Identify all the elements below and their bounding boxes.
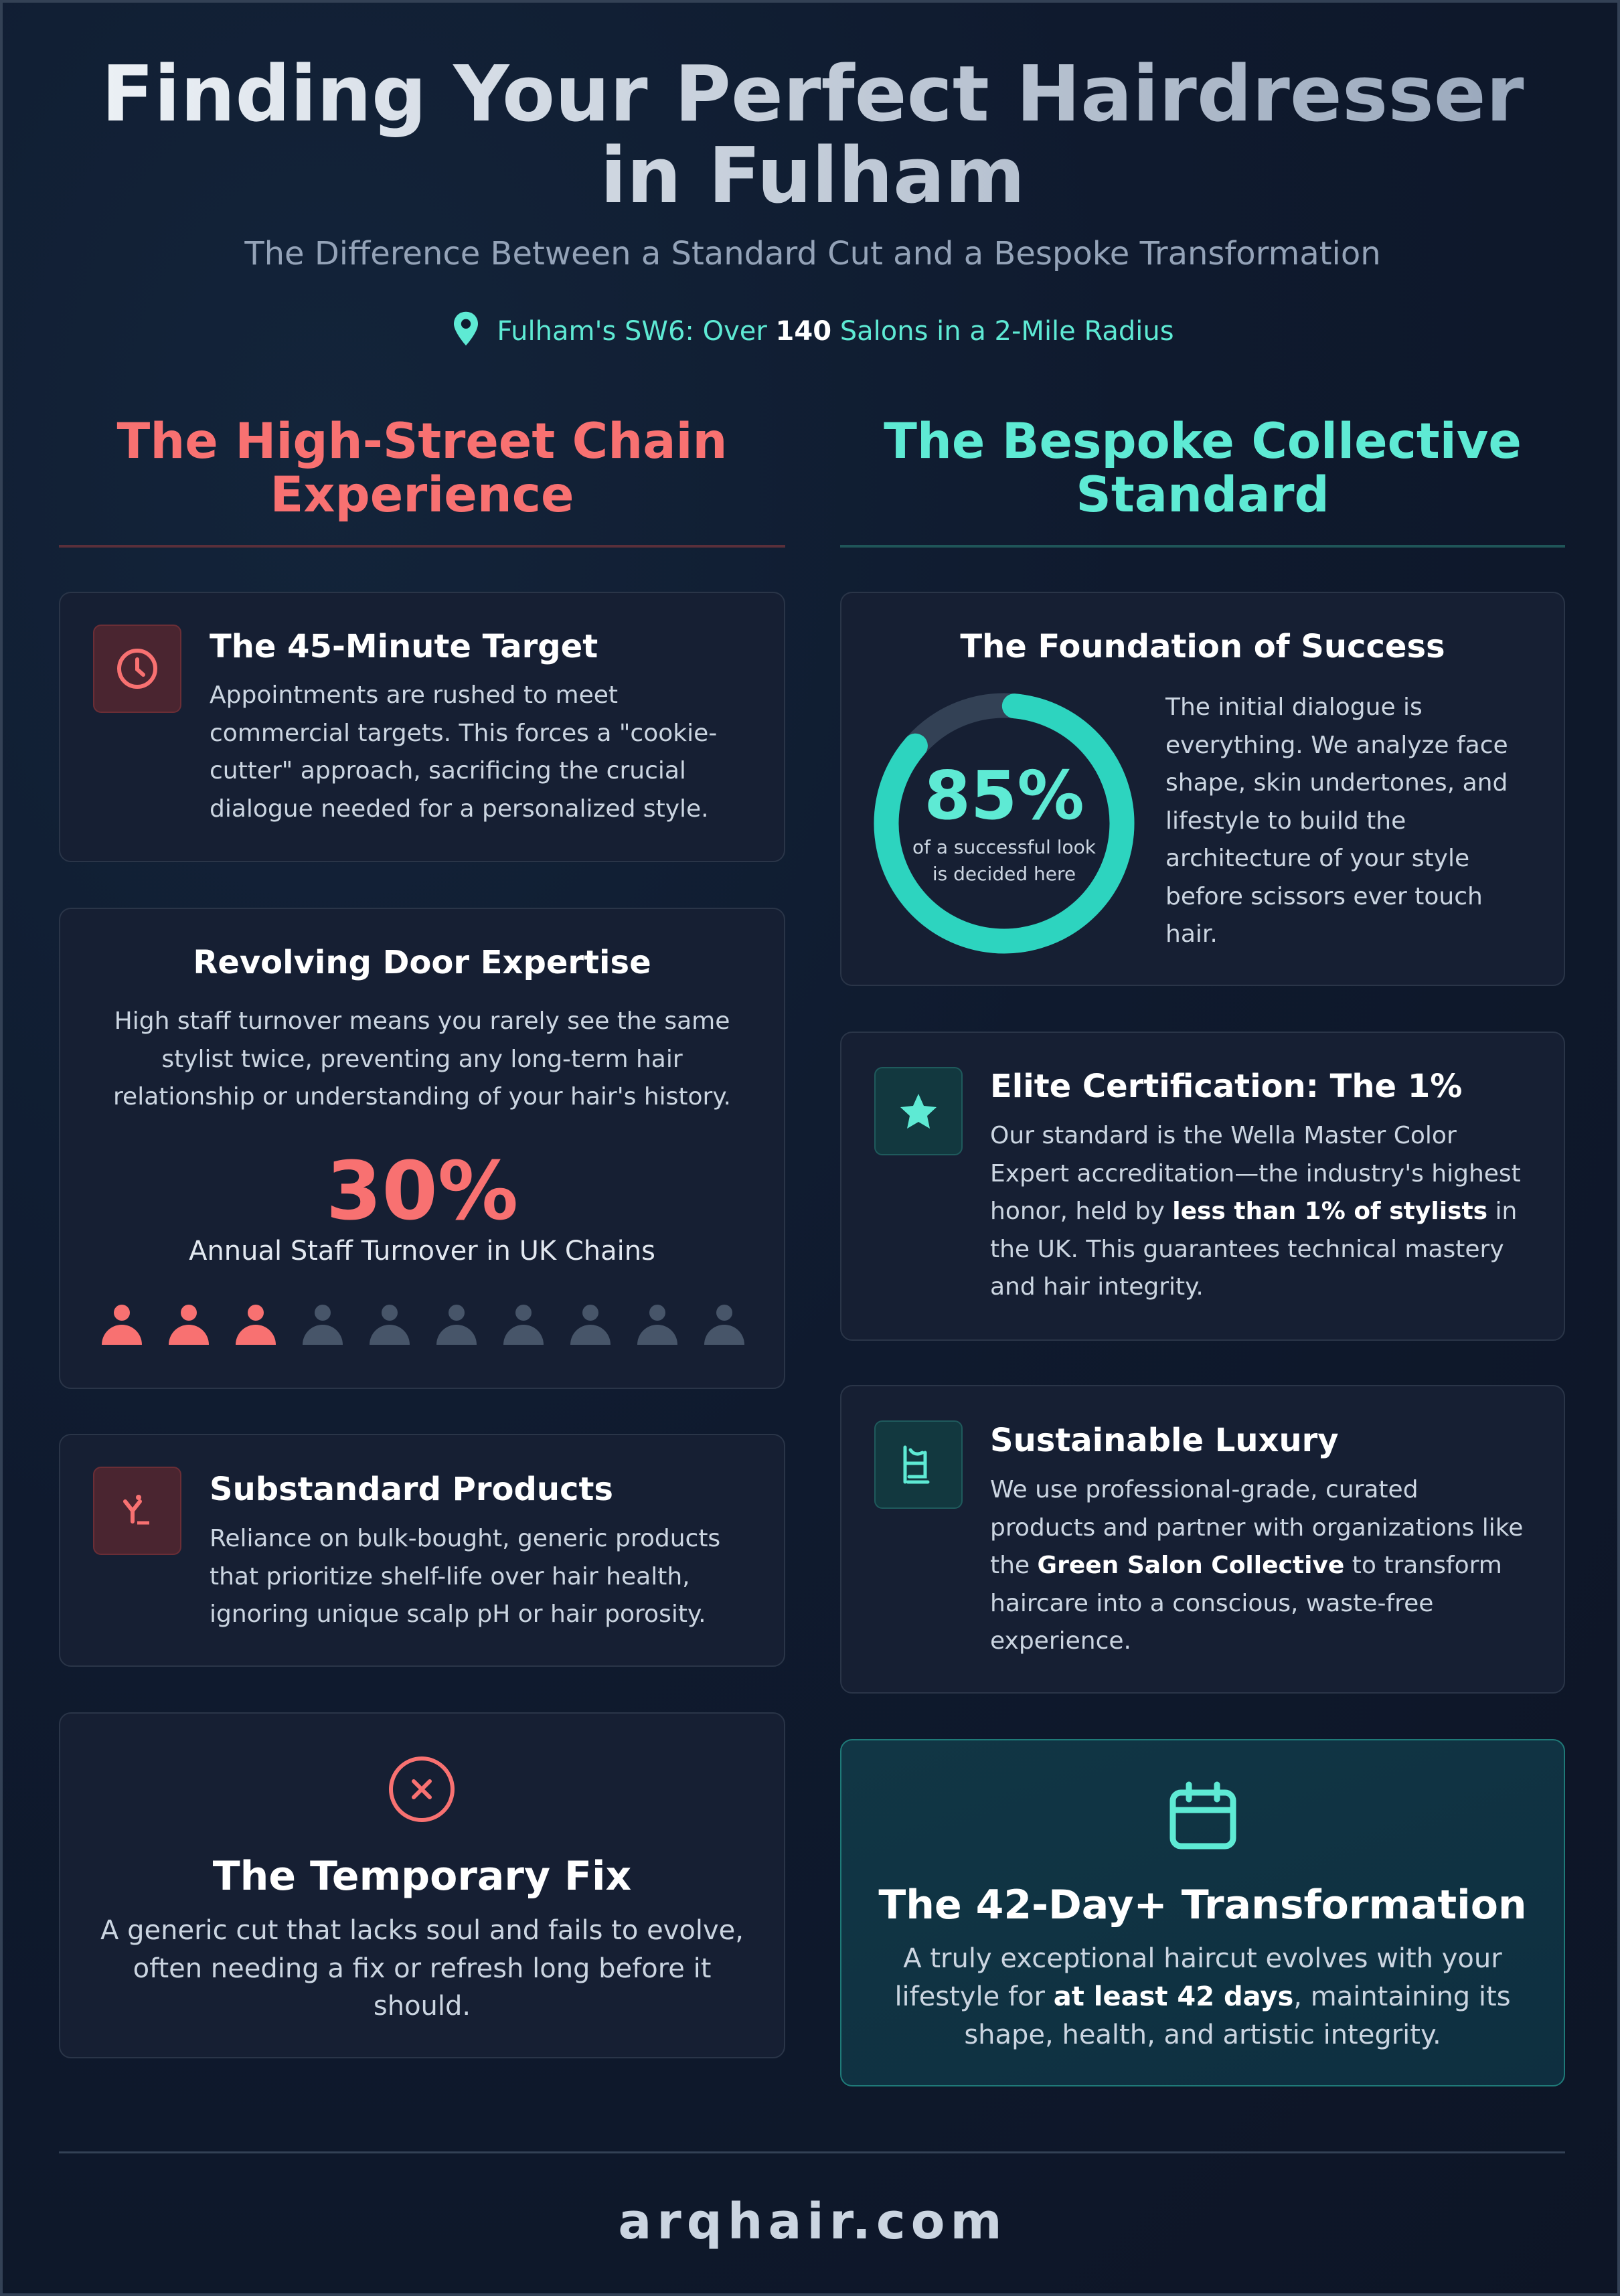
text bbox=[990, 1476, 1523, 1655]
heading: Elite Certification: The 1% bbox=[990, 1068, 1462, 1105]
location stat: Fulham's SW6: Over 140 Salons in a 2-Mile Radius bbox=[497, 316, 1174, 347]
text: High staff turnover means you rarely see the same bbox=[114, 1007, 730, 1035]
panel: 45-minute target bbox=[59, 592, 785, 862]
text: Our standard is the Wella Master Color bbox=[990, 1122, 1457, 1149]
text: Reliance on bulk-bought, generic products bbox=[210, 1525, 720, 1552]
text: the UK. This guarantees technical mastery bbox=[990, 1236, 1504, 1262]
text: that prioritize shelf-life over hair health, bbox=[210, 1562, 690, 1590]
heading: The Temporary Fix bbox=[213, 1853, 631, 1900]
text: relationship or understanding of your hair's history. bbox=[113, 1083, 731, 1111]
text: often needing a fix or refresh long before it bbox=[133, 1953, 711, 1984]
heading: right column: The Bespoke Collective bbox=[884, 413, 1522, 470]
panel: elite certification bbox=[840, 1032, 1565, 1341]
heading: The 45-Minute Target bbox=[210, 628, 598, 665]
stat caption: Annual Staff Turnover in UK Chains bbox=[189, 1236, 655, 1266]
heading: right column: Standard bbox=[1076, 467, 1329, 523]
heading: Revolving Door Expertise bbox=[193, 944, 651, 981]
text bbox=[210, 681, 717, 822]
heading: The 42-Day+ Transformation bbox=[878, 1882, 1527, 1929]
stat caption bbox=[912, 836, 1096, 885]
title bbox=[3, 54, 1620, 217]
text: Appointments are rushed to meet bbox=[210, 681, 618, 709]
text: shape, skin undertones, and bbox=[1165, 769, 1508, 797]
text: and hair integrity. bbox=[990, 1273, 1204, 1301]
stat caption: of a successful look bbox=[912, 836, 1096, 858]
title: in Fulham bbox=[600, 131, 1025, 221]
text bbox=[100, 1915, 744, 2022]
stat 30%: 30% bbox=[326, 1145, 518, 1238]
text bbox=[210, 1525, 720, 1628]
text: the Green Salon Collective to transform bbox=[990, 1552, 1502, 1579]
text: lifestyle to build the bbox=[1165, 807, 1406, 834]
icon: star bbox=[874, 1067, 963, 1155]
text: haircare into a conscious, waste-free bbox=[990, 1589, 1433, 1617]
text: before scissors ever touch bbox=[1165, 882, 1483, 910]
panel: foundation of success bbox=[840, 592, 1565, 986]
text bbox=[894, 1943, 1511, 2050]
heading: Sustainable Luxury bbox=[990, 1422, 1339, 1459]
heading: left column: The High-Street Chain bbox=[117, 413, 727, 470]
icon: map pin bbox=[454, 312, 478, 345]
text: should. bbox=[374, 1991, 471, 2022]
text: ignoring unique scalp pH or hair porosity. bbox=[210, 1601, 706, 1628]
donut chart 85% bbox=[874, 693, 1134, 953]
text: products and partner with organizations like bbox=[990, 1514, 1523, 1541]
text: cutter" approach, sacrificing the crucial bbox=[210, 757, 686, 785]
stat caption: is decided here bbox=[933, 863, 1076, 885]
heading: left column bbox=[116, 413, 727, 523]
heading: right column bbox=[884, 413, 1522, 523]
icon: clock bbox=[93, 625, 181, 713]
text: stylist twice, preventing any long-term hair bbox=[161, 1046, 683, 1072]
heading: The Foundation of Success bbox=[960, 628, 1445, 665]
text: A generic cut that lacks soul and fails to evolve, bbox=[100, 1915, 744, 1946]
text: lifestyle for at least 42 days, maintaining its bbox=[894, 1981, 1511, 2012]
panel: 42-day transformation bbox=[840, 1739, 1565, 2086]
text: everything. We analyze face bbox=[1165, 731, 1508, 759]
text: The initial dialogue is bbox=[1165, 693, 1423, 721]
icon: product bottle bbox=[93, 1467, 181, 1555]
icon: calendar bbox=[1170, 1782, 1236, 1849]
text: experience. bbox=[990, 1627, 1131, 1655]
text: hair. bbox=[1165, 920, 1218, 948]
text bbox=[990, 1122, 1521, 1301]
icon: x circle bbox=[389, 1756, 455, 1822]
panel: temporary fix bbox=[59, 1712, 785, 2058]
text bbox=[1165, 693, 1508, 948]
panel: revolving door bbox=[59, 908, 785, 1389]
stat 85%: 85% bbox=[924, 756, 1084, 835]
title: Finding Your Perfect Hairdresser bbox=[102, 50, 1524, 139]
text: Expert accreditation—the industry's highest bbox=[990, 1159, 1521, 1187]
text: We use professional-grade, curated bbox=[990, 1476, 1419, 1503]
heading: left column: Experience bbox=[270, 467, 574, 523]
panel: substandard products bbox=[59, 1434, 785, 1667]
text: A truly exceptional haircut evolves with your bbox=[903, 1943, 1502, 1974]
people icons bbox=[102, 1305, 744, 1345]
text: commercial targets. This forces a "cookie- bbox=[210, 719, 717, 747]
subtitle: The Difference Between a Standard Cut and a Bespoke Transformation bbox=[244, 235, 1381, 272]
text: honor, held by less than 1% of stylists in bbox=[990, 1198, 1517, 1225]
text: shape, health, and artistic integrity. bbox=[964, 2020, 1441, 2050]
text: dialogue needed for a personalized style. bbox=[210, 795, 709, 822]
text: architecture of your style bbox=[1165, 845, 1469, 872]
panel: sustainable luxury bbox=[840, 1385, 1565, 1694]
icon: salon chair bbox=[874, 1420, 963, 1509]
text bbox=[113, 1007, 731, 1111]
footer: website: arqhair.com bbox=[618, 2193, 1007, 2250]
heading: Substandard Products bbox=[210, 1471, 613, 1508]
